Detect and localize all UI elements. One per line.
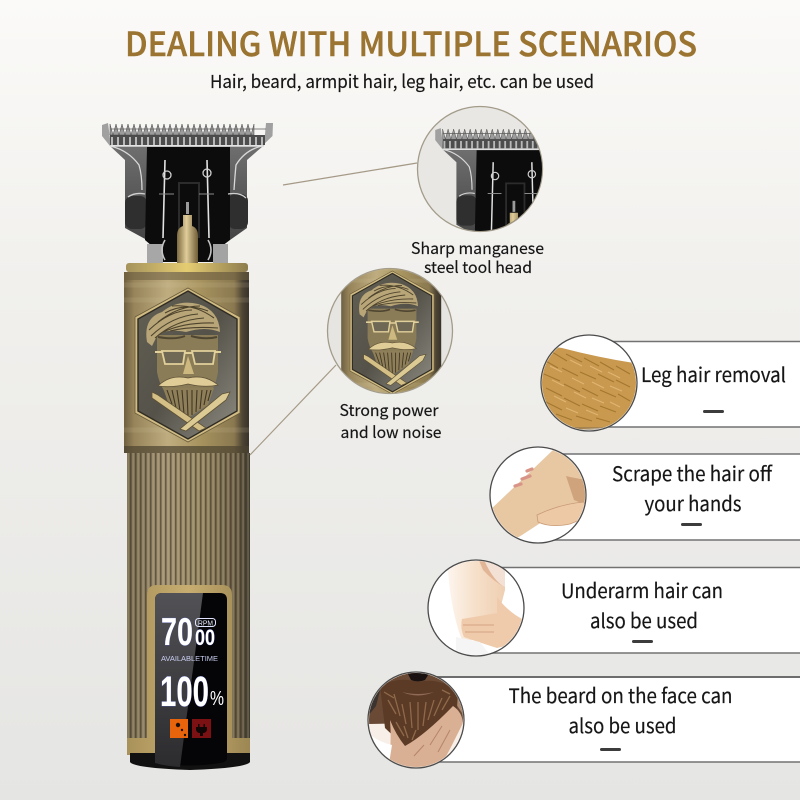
- black base: [130, 753, 250, 770]
- ribbed handle: [127, 453, 250, 740]
- LCD display: AVAILABLETIME: [161, 654, 218, 663]
- callout text: tool head: Sharp manganese: [411, 235, 544, 259]
- beard dash: [600, 748, 621, 751]
- callout text: power: [340, 397, 442, 443]
- hands label: Scrape the hair off: [612, 458, 773, 487]
- LCD display: RPM: [198, 620, 213, 628]
- trimmer product: [102, 123, 273, 770]
- gold ring: [126, 263, 248, 272]
- hands dash: [681, 523, 702, 526]
- LCD display: 70: [161, 611, 193, 654]
- subtitle: Hair, beard, armpit hair, leg hair, etc. can be used: [210, 68, 594, 94]
- callout text: tool head: [411, 235, 544, 278]
- underarm label: also be used: [590, 605, 698, 634]
- panel: hands: [488, 447, 800, 547]
- underarm label: [561, 575, 723, 634]
- panel: leg hair removal: [541, 335, 800, 432]
- LCD display: %: [210, 688, 224, 710]
- panel: beard: [367, 672, 800, 770]
- leg photo: [541, 335, 640, 432]
- callout text: tool head: steel tool head: [424, 254, 532, 278]
- LCD display: [155, 593, 227, 767]
- leader line: power: [250, 365, 336, 455]
- beard label: The beard on the face can: [508, 680, 732, 709]
- underarm dash: [632, 640, 653, 643]
- beard label: [508, 680, 732, 739]
- leg label: Leg hair removal: [641, 359, 786, 388]
- gold display frame: [127, 585, 250, 755]
- hands label: your hands: [644, 488, 742, 517]
- callout text: power: Strong power: [340, 397, 439, 421]
- callout text: power: and low noise: [340, 419, 442, 443]
- beard photo: [367, 672, 464, 770]
- engraved barber badge: [124, 272, 249, 453]
- underarm label: Underarm hair can: [561, 575, 723, 604]
- hands label: [612, 458, 773, 517]
- panel: underarm: [428, 558, 800, 660]
- leader line: tool head: [283, 163, 417, 185]
- underarm photo: [428, 558, 524, 660]
- trimmer head: [102, 123, 273, 263]
- callout circle: tool head: [416, 106, 544, 232]
- beard label: also be used: [568, 710, 676, 739]
- title: DEALING WITH MULTIPLE SCENARIOS: [125, 18, 697, 66]
- LCD display: 100: [160, 668, 209, 716]
- leg dash: [703, 410, 724, 413]
- LCD display: 00: [195, 625, 215, 650]
- hand photo: [488, 447, 590, 547]
- callout circle: barber badge: [326, 268, 454, 394]
